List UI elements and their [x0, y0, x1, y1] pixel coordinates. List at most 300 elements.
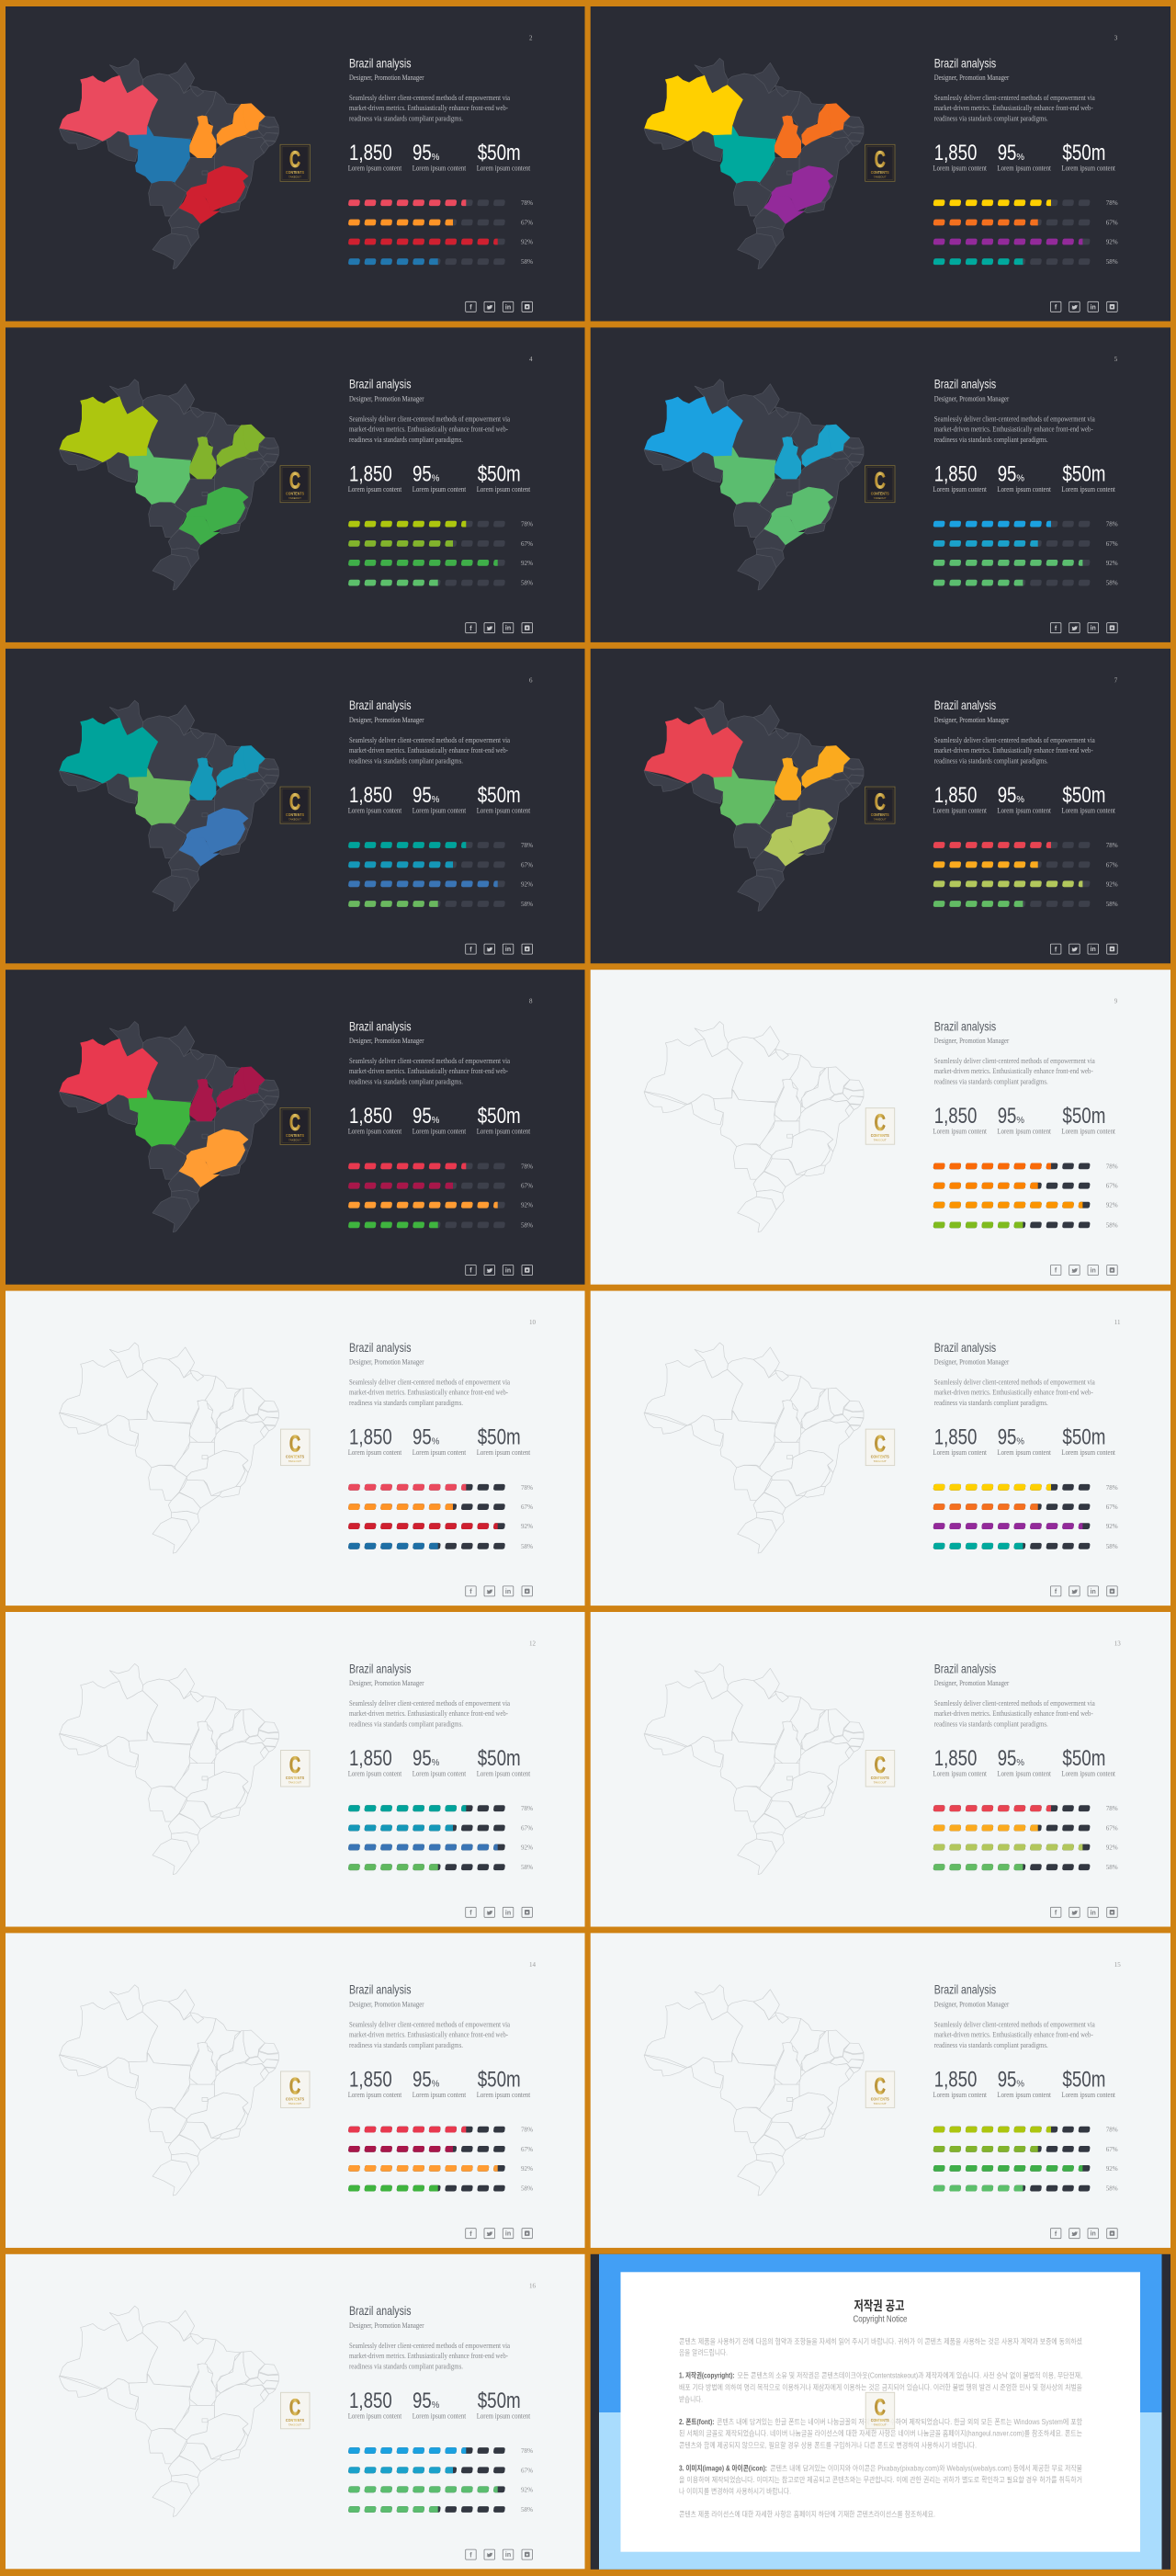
logo badge — [280, 1108, 310, 1145]
map of Brazil outline — [644, 1022, 864, 1232]
progress bars: 67% — [521, 1825, 533, 1833]
body text: Seamlessly deliver client-centered methods of empowerment via — [934, 1699, 1095, 1708]
progress bars: 78% — [521, 1805, 533, 1812]
logo badge: C — [875, 147, 886, 173]
panel: slide 8 dark red crimson orange green — [6, 970, 584, 1285]
social icons: in — [1091, 1589, 1096, 1595]
progress bars: 92% — [521, 1523, 533, 1530]
notice section 1: 1. 저작권(copyright): — [679, 2371, 735, 2380]
progress bars: 67% — [521, 2467, 533, 2474]
statistics: $50m — [478, 783, 521, 808]
statistics: Lorem ipsum content — [413, 806, 467, 814]
notice section 3: 나 이미지를 변경하여 사용하시기 바랍니다. — [679, 2486, 791, 2495]
subtitle: Designer, Promotion Manager — [934, 1358, 1009, 1367]
social icons — [466, 1907, 533, 1917]
statistics: % — [432, 1437, 439, 1447]
notice section 3: 3. 이미지(image) & 아이콘(icon): — [679, 2463, 767, 2472]
statistics: Lorem ipsum content — [997, 164, 1052, 173]
body text: Seamlessly deliver client-centered methods of empowerment via — [349, 1699, 510, 1708]
statistics: 1,850 — [934, 461, 977, 486]
progress bars: 67% — [521, 1504, 533, 1511]
logo badge — [280, 787, 310, 823]
page number: 10 — [529, 1319, 537, 1326]
title: Brazil analysis — [349, 55, 412, 70]
logo badge — [281, 1429, 310, 1466]
statistics: Lorem ipsum content — [413, 1448, 467, 1457]
title: Brazil analysis — [349, 698, 412, 712]
body text — [349, 1379, 510, 1407]
statistics: Lorem ipsum content — [933, 2091, 988, 2099]
map of Brazil outline — [59, 1663, 278, 1875]
body text — [934, 414, 1095, 444]
logo badge: CONTENTS — [871, 491, 889, 495]
social icons — [1050, 623, 1117, 633]
progress bars — [348, 842, 533, 908]
body text — [349, 94, 510, 123]
notice closing line: 콘텐츠 제품 라이선스에 대한 자세한 사항은 홈페이지 하단에 기재한 콘텐츠라이선스를 참조하세요. — [679, 2510, 935, 2519]
statistics: Lorem ipsum content — [1061, 806, 1116, 814]
logo badge: CONTENTS — [286, 2418, 304, 2423]
statistics: $50m — [1062, 783, 1105, 808]
title: Brazil analysis — [934, 1661, 996, 1675]
body text: Seamlessly deliver client-centered methods of empowerment via — [934, 1379, 1095, 1387]
statistics: 1,850 — [934, 1104, 977, 1129]
logo badge: CONTENTS — [286, 2096, 304, 2101]
body text — [349, 1057, 510, 1086]
title: Brazil analysis — [349, 1982, 412, 1997]
statistics: % — [1016, 1116, 1024, 1126]
progress bars: 92% — [521, 2165, 533, 2173]
statistics: % — [1016, 1758, 1024, 1768]
progress bars: 67% — [1106, 540, 1118, 548]
body text: readiness via standards compliant paradigms. — [349, 114, 463, 123]
progress bars: 78% — [521, 521, 533, 528]
statistics: $50m — [1062, 141, 1105, 165]
social icons: in — [505, 1589, 511, 1595]
body text: readiness via standards compliant paradigms. — [349, 1078, 463, 1086]
progress bars — [933, 1805, 1118, 1871]
statistics: Lorem ipsum content — [413, 1128, 467, 1136]
social icons — [466, 623, 533, 633]
statistics: $50m — [1062, 461, 1105, 486]
logo badge: TAKEOUT — [288, 2102, 301, 2105]
progress bars: 58% — [1106, 1221, 1118, 1229]
progress bars — [933, 521, 1118, 587]
social icons: in — [1091, 2231, 1096, 2238]
progress bars: 58% — [1106, 1864, 1118, 1871]
subtitle: Designer, Promotion Manager — [349, 1679, 424, 1687]
body text: market-driven metrics. Enthusiastically enhance front-end web- — [934, 1709, 1093, 1718]
social icons — [1050, 301, 1117, 312]
logo badge: TAKEOUT — [874, 817, 887, 821]
social icons: f — [1055, 947, 1057, 953]
progress bars: 78% — [1106, 199, 1118, 207]
social icons: in — [505, 1267, 511, 1274]
progress bars: 78% — [521, 1163, 533, 1170]
progress bars: 78% — [521, 842, 533, 849]
progress bars: 67% — [521, 2146, 533, 2153]
statistics: % — [432, 1116, 439, 1126]
statistics: 1,850 — [349, 1425, 392, 1450]
body text: readiness via standards compliant paradigms. — [349, 2362, 463, 2370]
body text — [934, 1379, 1095, 1407]
social icons — [466, 1265, 533, 1276]
panel: slide 3 dark yellow orange purple teal — [591, 6, 1170, 322]
statistics: Lorem ipsum content — [997, 806, 1052, 814]
statistics: $50m — [478, 1746, 521, 1771]
progress bars — [933, 199, 1118, 266]
social icons: in — [1091, 1267, 1096, 1274]
social icons: in — [505, 947, 511, 953]
body text: Seamlessly deliver client-centered methods of empowerment via — [349, 2020, 510, 2028]
social icons: in — [505, 1910, 511, 1916]
notice intro: 콘텐츠 제품을 사용하기 전에 다음의 협약과 조항들을 자세히 읽어 주시기 바랍니다. 귀하가 이 콘텐츠 제품을 사용하는 것은 사용자 계약과 보증에 동의하셨 — [679, 2336, 1082, 2345]
statistics: 95 — [998, 2067, 1016, 2092]
body text — [934, 1699, 1095, 1728]
logo badge: TAKEOUT — [874, 2423, 887, 2426]
social icons: f — [1055, 1589, 1057, 1595]
statistics: Lorem ipsum content — [348, 806, 402, 814]
logo badge: TAKEOUT — [288, 1459, 301, 1463]
title: Brazil analysis — [349, 377, 412, 392]
statistics: $50m — [478, 1425, 521, 1450]
subtitle: Designer, Promotion Manager — [349, 2321, 424, 2330]
statistics — [348, 1104, 531, 1136]
progress bars: 78% — [1106, 2127, 1118, 2134]
logo badge: CONTENTS — [286, 1133, 304, 1138]
progress bars: 58% — [1106, 258, 1118, 266]
notice subheading: Copyright Notice — [853, 2314, 908, 2325]
statistics: Lorem ipsum content — [348, 1448, 402, 1457]
logo badge — [865, 1750, 895, 1787]
statistics: Lorem ipsum content — [997, 2091, 1052, 2099]
progress bars: 92% — [521, 2486, 533, 2493]
notice intro: 음을 알려드립니다. — [679, 2348, 728, 2357]
notice section 1: 배포 기타 방법에 의하여 영리 목적으로 이용하거나 제삼자에게 이용하는 것은 금지되어 있습니다. 이러한 불법 행위 발견 시 준엄한 민사 및 형사상의 처벌을 — [679, 2383, 1082, 2392]
logo badge: CONTENTS — [871, 1776, 889, 1780]
logo badge: CONTENTS — [286, 170, 304, 175]
statistics: 95 — [413, 2389, 432, 2413]
logo badge — [280, 144, 310, 181]
progress bars: 78% — [1106, 1163, 1118, 1170]
logo badge: TAKEOUT — [288, 1139, 301, 1142]
body text — [934, 2020, 1095, 2049]
statistics: 95 — [998, 1746, 1016, 1771]
progress bars: 58% — [1106, 901, 1118, 908]
notice section 1: 모든 콘텐츠의 소유 및 저작권은 콘텐츠테이크아웃(Contentstakeout)과 제작자에게 있습니다. 사전 승낙 없이 불법적 이용, 무단전재, — [737, 2371, 1082, 2380]
statistics: 95 — [413, 1425, 432, 1450]
progress bars: 92% — [521, 1202, 533, 1209]
page number: 3 — [1114, 35, 1118, 42]
statistics: $50m — [1062, 1104, 1105, 1129]
body text: Seamlessly deliver client-centered methods of empowerment via — [349, 1379, 510, 1387]
statistics: % — [1016, 1437, 1024, 1447]
social icons — [466, 301, 533, 312]
body text: Seamlessly deliver client-centered methods of empowerment via — [934, 94, 1095, 102]
page number: 4 — [529, 356, 533, 363]
logo badge: C — [875, 1110, 886, 1136]
progress bars: 58% — [521, 1864, 533, 1871]
body text: readiness via standards compliant paradigms. — [349, 436, 463, 444]
statistics: % — [1016, 473, 1024, 483]
panel: slide 14 light red crimson orange green — [6, 1933, 584, 2248]
body text: market-driven metrics. Enthusiastically enhance front-end web- — [349, 2352, 508, 2360]
progress bars: 67% — [521, 1183, 533, 1190]
logo badge: CONTENTS — [871, 1455, 889, 1459]
panel: slide 11 light yellow orange purple teal — [591, 1291, 1170, 1606]
panel: slide 6 dark teal blue green — [6, 649, 584, 963]
logo badge: CONTENTS — [871, 170, 889, 175]
progress bars: 78% — [521, 2447, 533, 2455]
progress bars: 78% — [1106, 842, 1118, 849]
map of Brazil — [644, 700, 864, 911]
statistics: 95 — [413, 141, 432, 165]
statistics — [348, 1425, 531, 1457]
statistics: Lorem ipsum content — [1061, 485, 1116, 494]
body text: market-driven metrics. Enthusiastically enhance front-end web- — [934, 1389, 1093, 1397]
statistics: 1,850 — [349, 461, 392, 486]
body text: market-driven metrics. Enthusiastically enhance front-end web- — [934, 1067, 1093, 1075]
logo badge: TAKEOUT — [288, 496, 301, 500]
statistics: Lorem ipsum content — [477, 485, 531, 494]
statistics: 1,850 — [349, 783, 392, 808]
statistics: Lorem ipsum content — [348, 2091, 402, 2099]
notice section 3: 을 이용하여 제작되었습니다. 이미지는 참고로만 제공되고 콘텐츠와는 무관합니다. 이에 관한 권리는 귀하가 별도로 확인하고 필요할 경우 허가를 취득하거 — [679, 2475, 1082, 2484]
statistics: % — [432, 2400, 439, 2411]
notice section 1: 받습니다. — [679, 2394, 703, 2403]
body text — [349, 736, 510, 765]
logo badge: CONTENTS — [871, 2096, 889, 2101]
statistics: Lorem ipsum content — [477, 2091, 531, 2099]
body text: market-driven metrics. Enthusiastically enhance front-end web- — [934, 2030, 1093, 2038]
statistics: $50m — [478, 461, 521, 486]
notice section 2: 2. 폰트(font): — [679, 2418, 715, 2426]
subtitle: Designer, Promotion Manager — [934, 1037, 1009, 1045]
statistics: % — [432, 795, 439, 805]
statistics — [348, 141, 531, 173]
social icons: in — [505, 304, 511, 311]
logo badge: C — [289, 2073, 300, 2099]
statistics: Lorem ipsum content — [348, 2411, 402, 2420]
progress bars: 67% — [1106, 2146, 1118, 2153]
social icons: f — [1055, 626, 1057, 632]
statistics: 95 — [413, 783, 432, 808]
title: Brazil analysis — [934, 698, 996, 712]
logo badge: TAKEOUT — [874, 1781, 887, 1785]
title: Brazil analysis — [349, 1018, 412, 1033]
body text: market-driven metrics. Enthusiastically enhance front-end web- — [349, 1709, 508, 1718]
progress bars — [933, 1163, 1118, 1229]
logo badge — [865, 466, 895, 503]
page number: 14 — [529, 1961, 537, 1969]
body text: Seamlessly deliver client-centered methods of empowerment via — [934, 736, 1095, 744]
logo badge — [281, 1750, 310, 1787]
statistics: Lorem ipsum content — [477, 2411, 531, 2420]
progress bars — [348, 521, 533, 587]
progress bars: 92% — [1106, 560, 1118, 567]
progress bars: 78% — [521, 2127, 533, 2134]
logo badge — [281, 2071, 310, 2107]
panel: copyright notice — [591, 2254, 1170, 2570]
social icons: f — [469, 626, 472, 632]
body text: Seamlessly deliver client-centered methods of empowerment via — [349, 736, 510, 744]
logo badge — [281, 2392, 310, 2429]
page number: 5 — [1114, 356, 1118, 363]
progress bars: 92% — [1106, 2165, 1118, 2173]
logo badge: CONTENTS — [871, 1133, 889, 1138]
statistics: 1,850 — [934, 2067, 977, 2092]
social icons: in — [505, 2231, 511, 2238]
subtitle: Designer, Promotion Manager — [349, 394, 424, 403]
social icons: in — [1091, 304, 1096, 311]
logo badge: C — [289, 147, 300, 173]
social icons: in — [505, 2552, 511, 2559]
logo badge: C — [875, 468, 886, 494]
statistics: 1,850 — [934, 141, 977, 165]
subtitle: Designer, Promotion Manager — [934, 1679, 1009, 1687]
body text: market-driven metrics. Enthusiastically enhance front-end web- — [349, 425, 508, 433]
progress bars: 78% — [1106, 521, 1118, 528]
progress bars: 58% — [521, 1221, 533, 1229]
statistics — [933, 1104, 1116, 1136]
statistics: $50m — [478, 2389, 521, 2413]
body text: readiness via standards compliant paradigms. — [934, 756, 1048, 765]
progress bars: 92% — [1106, 239, 1118, 246]
statistics: % — [1016, 795, 1024, 805]
statistics: % — [432, 153, 439, 163]
social icons — [1050, 1586, 1117, 1596]
statistics — [348, 2389, 531, 2420]
social icons: f — [469, 2231, 472, 2238]
subtitle: Designer, Promotion Manager — [934, 2000, 1009, 2008]
statistics: Lorem ipsum content — [348, 485, 402, 494]
progress bars: 92% — [521, 560, 533, 567]
statistics: 1,850 — [349, 2067, 392, 2092]
progress bars: 58% — [521, 2506, 533, 2514]
statistics — [933, 1746, 1116, 1777]
progress bars: 58% — [521, 2185, 533, 2193]
logo badge: C — [289, 1110, 300, 1136]
body text: market-driven metrics. Enthusiastically enhance front-end web- — [349, 746, 508, 755]
statistics: 1,850 — [934, 783, 977, 808]
statistics: Lorem ipsum content — [477, 1128, 531, 1136]
progress bars — [348, 1484, 533, 1550]
statistics: Lorem ipsum content — [1061, 1448, 1116, 1457]
statistics — [348, 1746, 531, 1777]
page number: 12 — [529, 1640, 537, 1647]
body text: market-driven metrics. Enthusiastically enhance front-end web- — [349, 1067, 508, 1075]
statistics: Lorem ipsum content — [933, 1128, 988, 1136]
statistics: Lorem ipsum content — [413, 485, 467, 494]
statistics: 95 — [413, 1104, 432, 1129]
subtitle: Designer, Promotion Manager — [934, 716, 1009, 724]
social icons: in — [505, 626, 511, 632]
notice section 3: 콘텐츠 내에 담겨있는 이미지와 아이콘은 Pixabay(pixabay.com)와 Webalys(webalys.com) 등에서 제공한 무료 저작물 — [770, 2463, 1082, 2472]
page number: 11 — [1114, 1319, 1121, 1326]
statistics: Lorem ipsum content — [933, 164, 988, 173]
statistics: Lorem ipsum content — [997, 1448, 1052, 1457]
statistics: 95 — [998, 783, 1016, 808]
logo badge: CONTENTS — [871, 812, 889, 817]
statistics: Lorem ipsum content — [477, 164, 531, 173]
statistics: Lorem ipsum content — [1061, 164, 1116, 173]
logo badge: TAKEOUT — [874, 175, 887, 178]
body text — [349, 1699, 510, 1728]
logo badge: CONTENTS — [286, 491, 304, 495]
statistics: Lorem ipsum content — [348, 1128, 402, 1136]
logo badge: TAKEOUT — [288, 817, 301, 821]
statistics: Lorem ipsum content — [1061, 1770, 1116, 1777]
notice section 3 — [679, 2463, 1082, 2495]
body text — [349, 414, 510, 444]
body text — [934, 736, 1095, 765]
statistics: Lorem ipsum content — [997, 1770, 1052, 1777]
progress bars: 78% — [521, 1484, 533, 1492]
body text: market-driven metrics. Enthusiastically enhance front-end web- — [934, 746, 1093, 755]
logo badge: C — [289, 789, 300, 815]
statistics: Lorem ipsum content — [477, 1770, 531, 1777]
title: Brazil analysis — [349, 2303, 412, 2318]
map of Brazil — [59, 58, 278, 269]
notice section 2: 콘텐츠와 함께 제공되지 않으므로, 필요할 경우 상용 폰트를 구입하거나 다른 폰트로 변경하여 사용하시기 바랍니다. — [679, 2440, 977, 2449]
progress bars: 58% — [1106, 2185, 1118, 2193]
statistics — [933, 2067, 1116, 2099]
statistics: 95 — [413, 1746, 432, 1771]
map of Brazil outline — [644, 1985, 864, 2196]
logo badge — [865, 2071, 895, 2107]
body text: Seamlessly deliver client-centered methods of empowerment via — [934, 2020, 1095, 2028]
progress bars: 92% — [1106, 880, 1118, 888]
progress bars: 67% — [1106, 861, 1118, 868]
body text — [934, 1057, 1095, 1086]
notice section 2: 콘텐츠 내에 담겨있는 한글 폰트는 네이버 나눔글꼴의 저작권을 준수하여 제작되었습니다. 한글 외의 모든 폰트는 Windows System에 포함 — [717, 2417, 1082, 2426]
map of Brazil — [59, 380, 278, 590]
social icons: f — [1055, 1268, 1057, 1275]
body text: market-driven metrics. Enthusiastically enhance front-end web- — [349, 104, 508, 112]
logo badge: TAKEOUT — [288, 175, 301, 178]
statistics: 95 — [413, 461, 432, 486]
map of Brazil outline — [644, 1663, 864, 1875]
statistics: Lorem ipsum content — [997, 485, 1052, 494]
logo badge: CONTENTS — [871, 2418, 889, 2423]
social icons: f — [469, 1589, 472, 1595]
statistics: 95 — [998, 1425, 1016, 1450]
statistics: 1,850 — [349, 1746, 392, 1771]
body text — [349, 2020, 510, 2049]
body text: readiness via standards compliant paradigms. — [349, 756, 463, 765]
social icons: f — [469, 305, 472, 311]
title: Brazil analysis — [934, 55, 996, 70]
statistics — [348, 461, 531, 494]
statistics: Lorem ipsum content — [477, 1448, 531, 1457]
statistics: Lorem ipsum content — [933, 485, 988, 494]
statistics — [348, 2067, 531, 2099]
statistics: $50m — [478, 2067, 521, 2092]
statistics: Lorem ipsum content — [413, 2091, 467, 2099]
subtitle: Designer, Promotion Manager — [934, 74, 1009, 82]
body text: readiness via standards compliant paradigms. — [934, 436, 1048, 444]
statistics — [933, 1425, 1116, 1457]
map of Brazil — [59, 1022, 278, 1232]
statistics: Lorem ipsum content — [933, 1770, 988, 1777]
logo badge — [865, 787, 895, 823]
page number: 9 — [1114, 998, 1118, 1005]
body text — [934, 94, 1095, 123]
map of Brazil outline — [644, 1343, 864, 1553]
logo badge: C — [875, 789, 886, 815]
statistics: Lorem ipsum content — [1061, 2091, 1116, 2099]
social icons — [466, 1586, 533, 1596]
